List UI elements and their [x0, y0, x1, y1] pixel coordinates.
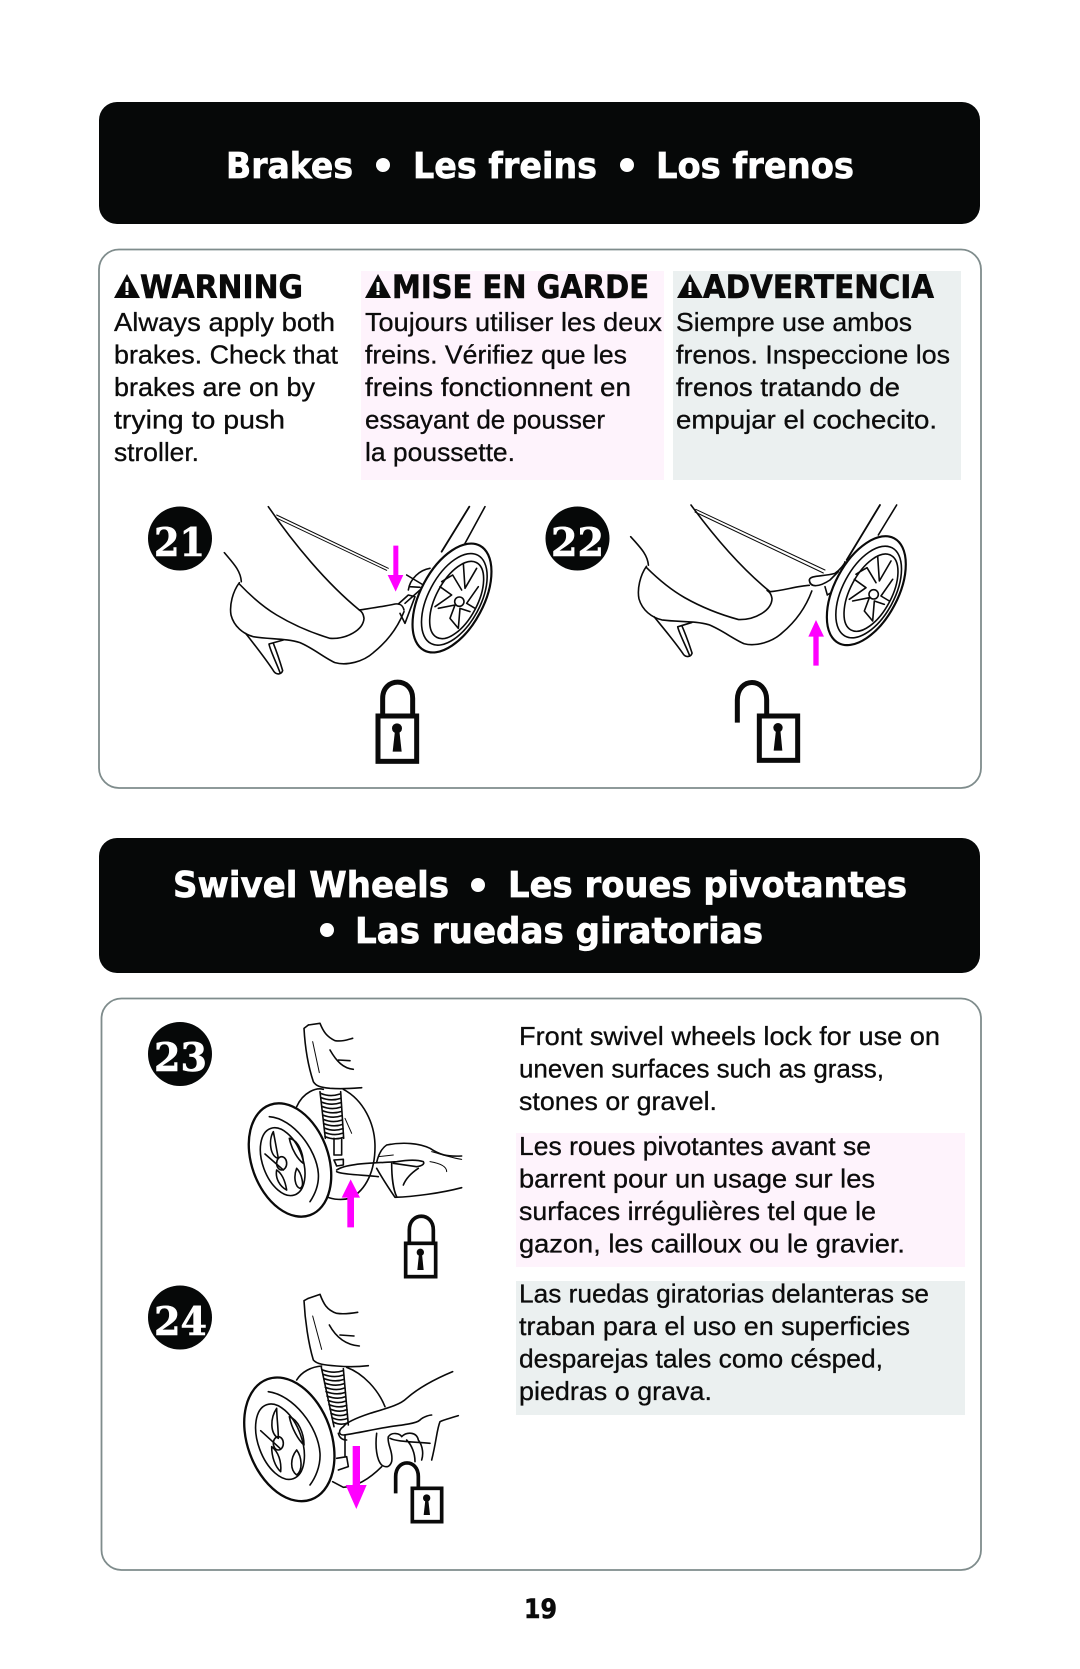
- icon: unlocked padlock: [737, 682, 798, 760]
- heading: brakes: Los frenos: [656, 146, 854, 187]
- heading: swivel wheels: Les roues pivotantes: [508, 865, 907, 906]
- arrow: down: [388, 546, 403, 592]
- page number: 19: [524, 1594, 557, 1625]
- warning block: French: freins fonctionnent en: [365, 372, 631, 402]
- warning block: French: essayant de pousser: [365, 404, 605, 434]
- step badge 21: 21: [154, 520, 205, 566]
- warning block: Spanish: frenos. Inspeccione los: [676, 340, 950, 370]
- text block: English: stones or gravel.: [519, 1086, 717, 1116]
- heading: swivel wheels: Swivel Wheels: [173, 865, 449, 906]
- arrow: up: [342, 1179, 360, 1227]
- step badge 21: [148, 506, 212, 570]
- icon: locked padlock: [378, 682, 417, 761]
- warning block: French: [361, 268, 664, 480]
- warning block: French: freins. Vérifiez que les: [365, 340, 627, 370]
- warning block: English: WARNING: [140, 268, 303, 306]
- heading: brakes: [99, 102, 980, 224]
- panel: brakes: [99, 250, 981, 788]
- warning block: Spanish: [673, 268, 961, 480]
- text block: French: gazon, les cailloux ou le gravier.: [519, 1228, 905, 1258]
- text block: French: barrent pour un usage sur les: [519, 1164, 875, 1194]
- text block: French: [516, 1131, 965, 1267]
- warning block: English: [114, 268, 339, 467]
- illustration: hand locking swivel wheel: [234, 1023, 462, 1277]
- text block: Spanish: desparejas tales como césped,: [519, 1344, 883, 1374]
- step badge 24: 24: [154, 1299, 207, 1345]
- step badge 24: [148, 1286, 212, 1350]
- step badge 23: 23: [154, 1035, 207, 1081]
- panel: swivel wheels: [102, 998, 981, 1570]
- heading: swivel wheels: Las ruedas giratorias: [355, 911, 763, 952]
- step badge 22: [546, 506, 610, 570]
- arrow: up: [808, 620, 824, 666]
- warning block: Spanish: frenos tratando de: [676, 372, 900, 402]
- text block: English: [519, 1021, 940, 1116]
- heading: brakes: Brakes: [226, 146, 353, 187]
- icon: unlocked padlock: [396, 1463, 442, 1522]
- warning block: English: brakes are on by: [114, 372, 315, 402]
- text block: English: Front swivel wheels lock for use on: [519, 1021, 940, 1051]
- step badge 23: [148, 1022, 212, 1086]
- text block: French: surfaces irrégulières tel que le: [519, 1196, 876, 1226]
- warning block: Spanish: empujar el cochecito.: [676, 404, 937, 434]
- text block: Spanish: Las ruedas giratorias delanteras se: [519, 1278, 929, 1308]
- illustration: foot pressing brake down: [224, 507, 508, 761]
- warning block: French: la poussette.: [365, 437, 515, 467]
- heading: brakes: Les freins: [413, 146, 597, 187]
- icon: locked padlock: [406, 1216, 436, 1277]
- heading: swivel wheels: [99, 838, 980, 973]
- text block: Spanish: traban para el uso en superficies: [519, 1311, 910, 1341]
- text block: French: Les roues pivotantes avant se: [519, 1131, 871, 1161]
- illustration: hand unlocking swivel wheel: [228, 1294, 458, 1522]
- text block: Spanish: [516, 1278, 965, 1415]
- warning block: English: trying to push: [114, 404, 285, 434]
- text block: Spanish: piedras o grava.: [519, 1376, 712, 1406]
- text block: English: uneven surfaces such as grass,: [519, 1054, 884, 1084]
- warning block: English: stroller.: [114, 437, 199, 467]
- warning block: English: Always apply both: [114, 307, 335, 337]
- step badge 22: 22: [551, 520, 604, 566]
- warning block: English: brakes. Check that: [114, 340, 339, 370]
- warning block: Spanish: ADVERTENCIA: [703, 268, 934, 306]
- warning block: French: MISE EN GARDE: [392, 268, 649, 306]
- arrow: down: [346, 1446, 367, 1509]
- warning block: Spanish: Siempre use ambos: [676, 307, 912, 337]
- warning block: French: Toujours utiliser les deux: [365, 307, 662, 337]
- illustration: foot lifting brake up: [631, 505, 922, 760]
